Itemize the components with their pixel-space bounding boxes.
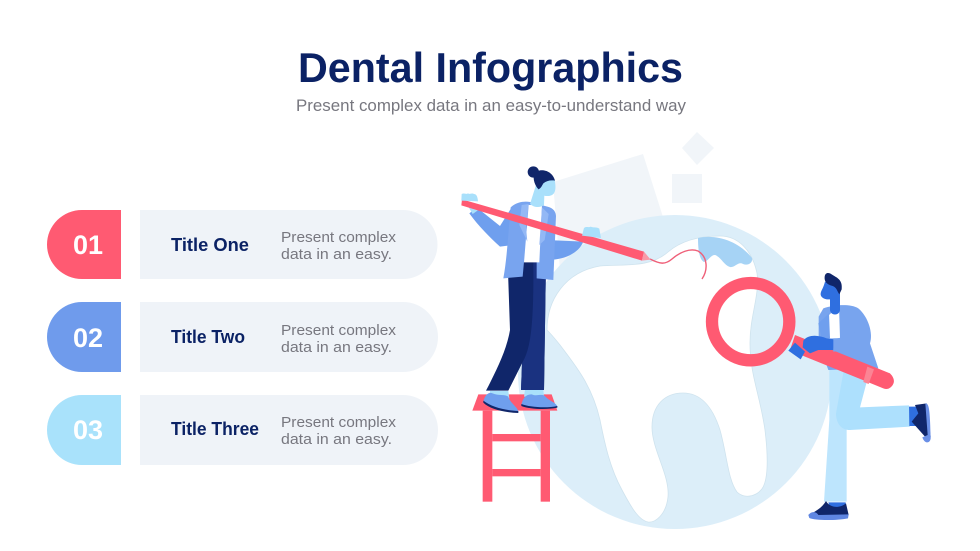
woman figure <box>461 166 651 413</box>
magnifying glass <box>712 283 894 389</box>
card two <box>140 302 438 372</box>
card one: data in an easy. <box>281 246 392 263</box>
card three: Present complex <box>281 414 397 431</box>
card three: Title Three <box>171 418 259 439</box>
panel: row one <box>47 210 438 279</box>
woman legs and shoes <box>483 262 557 413</box>
card two: data in an easy. <box>281 339 392 356</box>
man legs and shoes <box>808 357 931 520</box>
man figure <box>712 273 931 520</box>
man torso and head <box>712 273 894 389</box>
subtitle: Present complex data in an easy-to-understand way <box>296 97 687 115</box>
background circle <box>518 215 832 529</box>
card two: Title Two <box>171 326 245 347</box>
badge 03 <box>47 395 121 465</box>
tooth plaque cap <box>698 237 752 267</box>
badge 02: 02 <box>73 323 103 353</box>
stool <box>472 394 557 502</box>
panel: row two <box>47 302 438 372</box>
badge 01 <box>47 210 121 279</box>
illustration: dental scene <box>461 132 931 529</box>
panel: row three <box>47 395 438 465</box>
woman torso, arms and head <box>461 166 651 280</box>
badge 01: 01 <box>73 230 103 260</box>
title: Dental Infographics <box>298 44 683 91</box>
card one <box>140 210 438 279</box>
card two: Present complex <box>281 322 397 339</box>
card three: data in an easy. <box>281 431 392 448</box>
badge 02 <box>47 302 121 372</box>
badge 03: 03 <box>73 415 103 445</box>
background shapes <box>553 132 714 270</box>
card one: Present complex <box>281 229 397 246</box>
floss line <box>650 250 706 279</box>
card one: Title One <box>171 234 249 255</box>
toothbrush pencil <box>461 199 651 261</box>
tooth <box>547 236 767 522</box>
card three <box>140 395 438 465</box>
